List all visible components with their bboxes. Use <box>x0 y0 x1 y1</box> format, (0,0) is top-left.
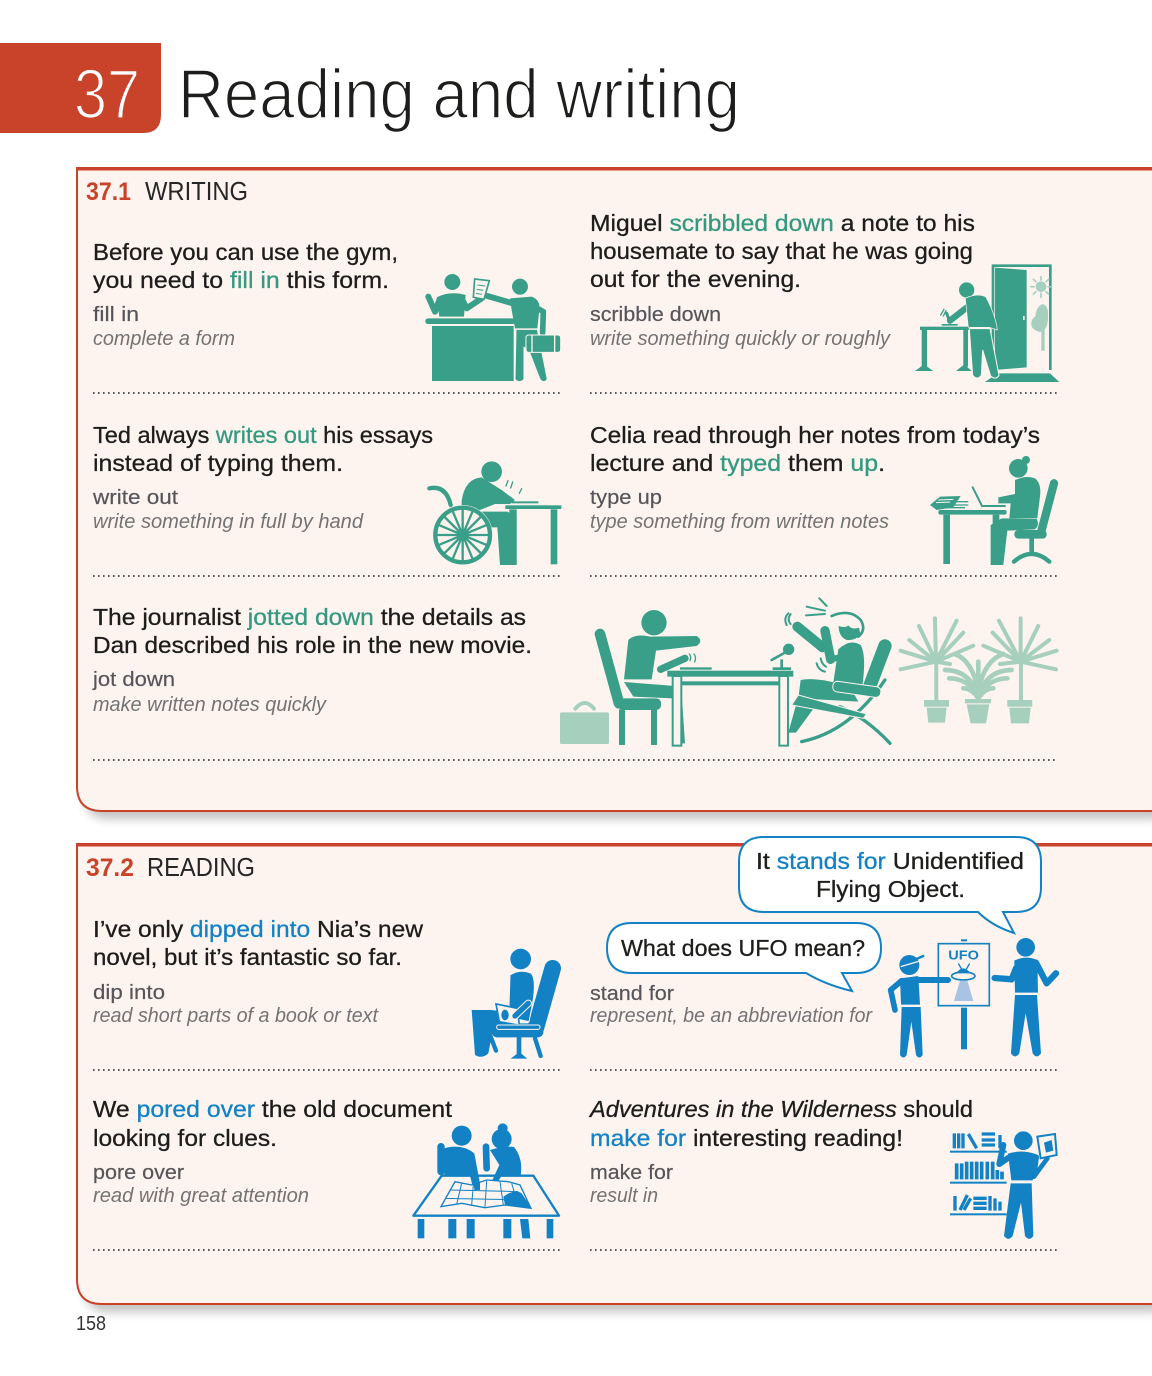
entry: dip into: read short parts of a book or text <box>93 1005 379 1027</box>
panel shadow <box>84 1200 1152 1312</box>
entry: fill in: complete a form <box>93 328 235 350</box>
divider <box>93 1069 1059 1071</box>
entry: make for: make for interesting reading! <box>590 1125 903 1151</box>
entry: scribble down: scribble down <box>590 304 721 326</box>
entry: pore over: looking for clues. <box>93 1125 277 1151</box>
entry: pore over: We pored over the old document <box>93 1096 453 1122</box>
icon: interview scene with plants <box>560 598 1057 746</box>
entry: jot down: jot down <box>92 669 175 691</box>
entry: dip into: dip into <box>93 982 165 1004</box>
entry: fill in: Before you can use the gym, <box>93 239 398 265</box>
entry: make for <box>588 1096 973 1207</box>
entry: write out <box>92 422 433 533</box>
icon: table <box>667 644 794 746</box>
entry: make for: make for <box>590 1162 673 1184</box>
heading: 37.2 reading <box>86 852 255 882</box>
entry: scribble down: Miguel scribbled down a note to his <box>590 210 975 236</box>
panel background <box>77 845 1152 1304</box>
icon: two people poring over map <box>413 1123 559 1238</box>
icon: potted plants <box>901 618 1057 723</box>
entry: scribble down <box>590 210 975 350</box>
icon: two people at UFO sign <box>891 938 1056 1057</box>
callout: what does UFO mean <box>607 923 881 991</box>
heading: 37.2 reading: 37.2 <box>86 854 134 882</box>
entry: pore over: read with great attention <box>93 1185 309 1207</box>
entry: scribble down: out for the evening. <box>590 266 801 292</box>
icon: man at door scribbling note <box>915 266 1059 382</box>
panel: reading <box>76 837 1152 1312</box>
icon: journalist <box>600 610 700 745</box>
entry: make for: Adventures in the Wilderness should <box>588 1096 973 1122</box>
entry: type up: type something from written notes <box>590 511 889 533</box>
entry: pore over: pore over <box>93 1162 184 1184</box>
entry: jot down: The journalist jotted down the details as <box>93 604 526 630</box>
panel background <box>77 169 1152 811</box>
divider <box>93 392 1059 394</box>
entry: stand for: stand for <box>590 983 674 1005</box>
heading: 37.1 writing: WRITING <box>145 176 248 206</box>
entry: dip into: novel, but it’s fantastic so far. <box>93 944 402 970</box>
icon: film star in chair <box>785 598 890 743</box>
entry: type up <box>590 422 1040 533</box>
entry: jot down: Dan described his role in the new movie. <box>93 632 532 658</box>
entry: write out: write something in full by hand <box>93 511 364 533</box>
entry: write out: instead of typing them. <box>93 450 343 476</box>
divider <box>93 759 1058 761</box>
divider <box>93 1249 1059 1251</box>
icon: person in wheelchair writing <box>429 461 562 565</box>
entry: write out: Ted always writes out his essays <box>93 422 433 448</box>
entry: jot down: make written notes quickly <box>93 694 327 716</box>
icon: two people at UFO sign: UFO <box>948 948 979 962</box>
entry: type up: type up <box>590 487 662 509</box>
entry: fill in: you need to fill in this form. <box>93 267 389 293</box>
callout: it stands for: Flying Object. <box>816 876 965 902</box>
entry: dip into <box>93 916 423 1027</box>
entry: write out: write out <box>92 487 178 509</box>
entry: scribble down: write something quickly or roughly <box>590 328 891 350</box>
entry: make for: result in <box>590 1185 658 1207</box>
panel top rule <box>76 167 1152 170</box>
title: Reading and writing <box>178 55 740 133</box>
divider <box>93 575 1059 577</box>
heading: 37.1 writing <box>86 176 248 206</box>
panel top rule <box>76 843 1152 846</box>
chapter number tab: 37 <box>74 55 140 133</box>
entry: stand for: represent, be an abbreviation for <box>590 1005 873 1027</box>
entry: fill in <box>93 239 398 350</box>
entry: type up: Celia read through her notes from today’s <box>590 422 1040 448</box>
entry: jot down <box>92 604 532 716</box>
page number: 158 <box>76 1313 106 1335</box>
entry: dip into: I’ve only dipped into Nia’s new <box>93 916 423 942</box>
entry: scribble down: housemate to say that he was going <box>590 238 973 264</box>
entry: pore over <box>93 1096 453 1207</box>
chapter number tab <box>0 43 161 133</box>
callout: it stands for: It stands for Unidentified <box>756 848 1024 874</box>
panel: writing <box>76 167 1152 819</box>
icon: woman typing at laptop <box>930 456 1054 565</box>
icon: briefcase <box>560 703 609 744</box>
icon: person with book at shelves <box>950 1131 1057 1239</box>
icon: person reading in armchair <box>472 949 553 1059</box>
entry: stand for <box>590 983 873 1027</box>
heading: 37.1 writing: 37.1 <box>86 178 131 206</box>
chapter header <box>0 43 740 133</box>
entry: fill in: fill in <box>93 304 139 326</box>
entry: type up: lecture and typed them up. <box>590 450 885 476</box>
callout: what does UFO mean: What does UFO mean? <box>621 935 865 961</box>
heading: 37.2 reading: READING <box>147 852 255 882</box>
panel shadow <box>84 700 1152 819</box>
callout: it stands for <box>739 837 1041 933</box>
icon: reception desk and form <box>425 274 561 382</box>
